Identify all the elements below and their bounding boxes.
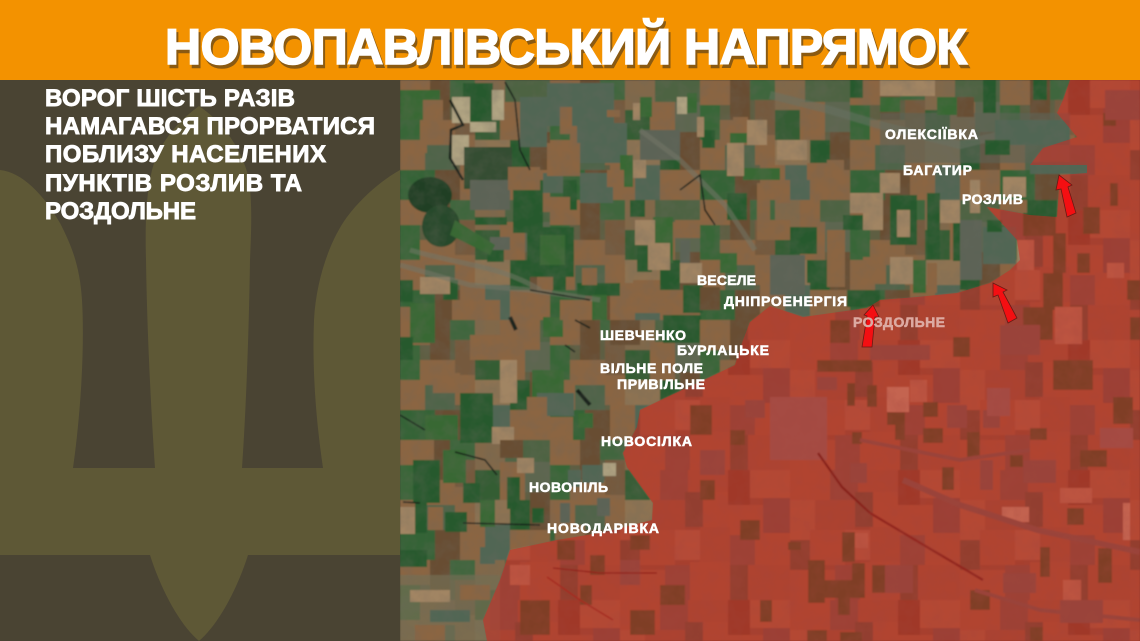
south-west fields: [460, 393, 493, 443]
place labels: БУРЛАЦЬКЕ: [677, 342, 769, 358]
south central occupied fields: [557, 540, 575, 560]
place labels: РОЗЛИВ: [962, 191, 1023, 207]
place labels: ШЕВЧЕНКО: [600, 327, 686, 343]
north-east fields: [850, 80, 863, 98]
panel: left text panel: [0, 80, 400, 641]
text block: summary: НАМАГАВСЯ ПРОРВАТИСЯ: [45, 113, 375, 140]
header band: [0, 0, 1140, 80]
place labels: НОВОСІЛКА: [601, 433, 692, 449]
rivers and ponds: [400, 82, 983, 620]
arrow: east of Rozdolne: [993, 283, 1017, 323]
map fields: [400, 80, 1140, 641]
place labels: ВЕСЕЛЕ: [697, 272, 756, 288]
text block: summary: ПУНКТІВ РОЗЛИВ ТА: [45, 170, 302, 197]
map: satellite view: [400, 80, 1140, 641]
place labels: НОВОДАРІВКА: [547, 520, 659, 536]
arrow: near Rozlyv: [1056, 175, 1076, 217]
place labels: НОВОПІЛЬ: [529, 479, 608, 495]
place labels: ПРИВІЛЬНЕ: [617, 376, 705, 392]
icon: trident watermark: [0, 106, 400, 641]
place labels: ДНІПРОЕНЕРГІЯ: [724, 293, 847, 309]
text block: summary: ВОРОГ ШІСТЬ РАЗІВ: [45, 85, 295, 112]
title: НОВОПАВЛІВСЬКИЙ НАПРЯМОК: [165, 18, 967, 75]
east occupied fields: [1023, 213, 1056, 236]
place labels: ВІЛЬНЕ ПОЛЕ: [600, 360, 703, 376]
place labels: [529, 126, 1023, 536]
title: НОВОПАВЛІВСЬКИЙ НАПРЯМОК: [167, 22, 969, 78]
map darkening layer: [400, 80, 1140, 641]
satellite texture: [400, 80, 1108, 602]
place labels: РОЗДОЛЬНЕ: [853, 314, 945, 330]
occupied territory overlay: [483, 80, 1140, 641]
text block: summary: РОЗДОЛЬНЕ: [45, 198, 196, 225]
arrow: near Rozdolne: [862, 305, 879, 347]
place labels: БАГАТИР: [903, 162, 972, 178]
text block: summary: ПОБЛИЗУ НАСЕЛЕНИХ: [45, 141, 326, 168]
place labels: ОЛЕКСІЇВКА: [885, 126, 978, 142]
grey town and valley bands: [400, 130, 755, 300]
text block: summary: [45, 85, 375, 225]
